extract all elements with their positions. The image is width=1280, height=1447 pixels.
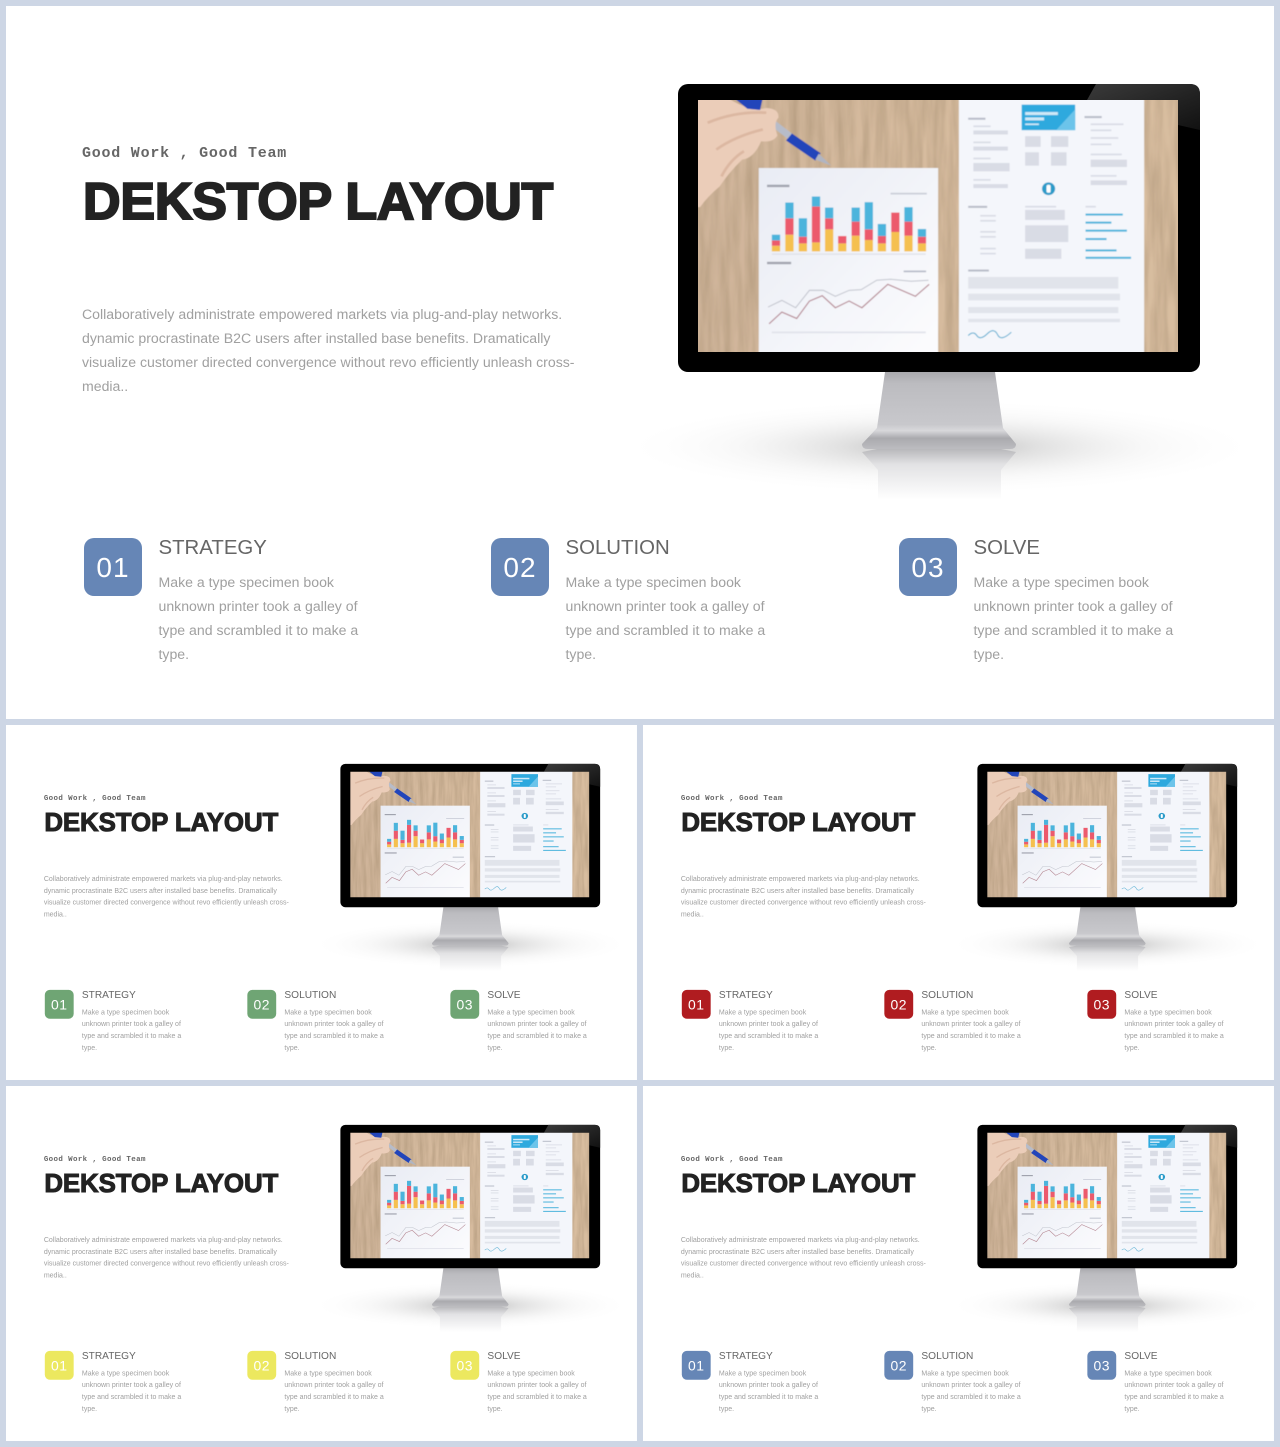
text block: description: visualize customer directed convergence without revo efficiently unleash cross- <box>681 898 926 906</box>
item 02: solution: SOLUTION <box>921 989 973 1000</box>
text block: description: visualize customer directed convergence without revo efficiently unleash cross- <box>44 898 289 906</box>
item 02: solution: type and scrambled it to make a <box>284 1393 384 1401</box>
panel: small slide, red theme <box>643 725 1274 1080</box>
item 01: strategy: Make a type specimen book <box>82 1008 169 1016</box>
item 03: solve: SOLVE <box>487 989 521 1000</box>
text block: description <box>681 874 926 918</box>
text block: description: dynamic procrastinate B2C users after installed base benefits. Dramatically <box>681 886 914 894</box>
item 03: solve: SOLVE <box>974 537 1040 559</box>
text block: description: Collaboratively administrate empowered markets via plug-and-play networks. <box>44 1235 283 1243</box>
title: DEKSTOP LAYOUT <box>681 1169 915 1198</box>
item 02: solution: type. <box>284 1044 300 1052</box>
item 01: strategy: STRATEGY <box>719 1350 773 1361</box>
item 02: solution: type. <box>284 1405 300 1413</box>
item 01: strategy <box>84 537 358 662</box>
item 03: solve: unknown printer took a galley of <box>1124 1381 1223 1389</box>
item 03: solve: 03 <box>1094 997 1110 1012</box>
item 02: solution: type. <box>921 1044 937 1052</box>
item 03: solve: SOLVE <box>487 1350 521 1361</box>
text block: description: Collaboratively administrate empowered markets via plug-and-play networks. <box>681 874 920 882</box>
item 01: strategy: type and scrambled it to make a <box>719 1032 818 1040</box>
item 03: solve: type and scrambled it to make a <box>1124 1032 1224 1040</box>
item 03: solve: type. <box>974 646 1004 662</box>
text block: description <box>82 306 574 394</box>
item 01: strategy: STRATEGY <box>719 989 773 1000</box>
image: desktop monitor showing charts <box>977 764 1238 966</box>
text block: description: visualize customer directed convergence without revo efficiently unleash cross- <box>44 1259 289 1267</box>
item 02: solution: type and scrambled it to make a <box>566 622 765 638</box>
panel: small slide, green theme <box>6 725 637 1080</box>
item 03: solve: Make a type specimen book <box>1124 1369 1212 1377</box>
item 03: solve: type and scrambled it to make a <box>487 1393 587 1401</box>
text block: description: dynamic procrastinate B2C users after installed base benefits. Dramatically <box>44 1247 277 1255</box>
item 02: solution: SOLUTION <box>284 989 336 1000</box>
item 01: strategy: STRATEGY <box>158 537 267 559</box>
item 01: strategy <box>682 1350 818 1413</box>
item 02: solution: SOLUTION <box>284 1350 336 1361</box>
item 02: solution: Make a type specimen book <box>921 1369 1009 1377</box>
item 01: strategy: Make a type specimen book <box>158 574 334 590</box>
text block: description: Collaboratively administrate empowered markets via plug-and-play networks. <box>44 874 283 882</box>
item 02: solution: SOLUTION <box>566 537 670 559</box>
text block: description <box>44 874 289 918</box>
item 03: solve: 03 <box>457 1358 473 1373</box>
item 02: solution: 02 <box>503 552 537 583</box>
item 02: solution <box>884 989 1021 1052</box>
item 02: solution: type and scrambled it to make a <box>921 1393 1021 1401</box>
item 01: strategy: 01 <box>51 1358 67 1373</box>
text block: description <box>44 1235 289 1279</box>
item 03: solve: 03 <box>1094 1358 1110 1373</box>
text block: description: dynamic procrastinate B2C users after installed base benefits. Dramatically <box>82 330 550 346</box>
item 02: solution: SOLUTION <box>921 1350 973 1361</box>
panel: small slide, blue theme <box>643 1086 1274 1441</box>
image: desktop monitor showing charts <box>340 1124 600 1327</box>
item 02: solution <box>247 989 384 1052</box>
item 02: solution: type. <box>566 646 596 662</box>
item 01: strategy: type. <box>719 1044 734 1052</box>
item 03: solve: Make a type specimen book <box>487 1369 575 1377</box>
item 02: solution: Make a type specimen book <box>284 1008 372 1016</box>
image: desktop monitor showing charts <box>977 1124 1238 1327</box>
item 01: strategy: type. <box>82 1044 97 1052</box>
item 03: solve: Make a type specimen book <box>974 574 1149 590</box>
text block: description: Collaboratively administrate empowered markets via plug-and-play networks. <box>681 1235 920 1243</box>
item 03: solve: type. <box>1124 1044 1140 1052</box>
item 02: solution <box>491 537 766 662</box>
item 01: strategy: unknown printer took a galley of <box>82 1381 181 1389</box>
item 02: solution: unknown printer took a galley of <box>284 1381 383 1389</box>
item 01: strategy: type. <box>158 646 189 662</box>
item 01: strategy: Make a type specimen book <box>82 1369 169 1377</box>
item 02: solution: type and scrambled it to make a <box>921 1032 1021 1040</box>
text block: description: dynamic procrastinate B2C users after installed base benefits. Dramatically <box>681 1247 914 1255</box>
item 02: solution: unknown printer took a galley of <box>921 1381 1020 1389</box>
item 01: strategy: type and scrambled it to make a <box>719 1393 818 1401</box>
title: DEKSTOP LAYOUT <box>681 808 915 837</box>
kicker: Good Work, Good Team: Good Work , Good Team <box>681 1155 783 1164</box>
item 01: strategy <box>44 1350 182 1413</box>
item 02: solution: type. <box>921 1405 937 1413</box>
item 03: solve: SOLVE <box>1124 989 1158 1000</box>
item 03: solve: SOLVE <box>1124 1350 1158 1361</box>
item 03: solve: unknown printer took a galley of <box>487 1381 586 1389</box>
item 02: solution: Make a type specimen book <box>566 574 741 590</box>
kicker: Good Work, Good Team: Good Work , Good Team <box>82 145 287 162</box>
item 01: strategy: type and scrambled it to make a <box>82 1393 181 1401</box>
text block: description: Collaboratively administrate empowered markets via plug-and-play networks. <box>82 306 562 322</box>
item 02: solution: 02 <box>891 1358 907 1373</box>
item 02: solution <box>247 1350 384 1413</box>
text block: description: visualize customer directed convergence without revo efficiently unleash cross- <box>82 354 574 370</box>
item 01: strategy: 01 <box>688 997 704 1012</box>
title: DEKSTOP LAYOUT <box>83 173 553 231</box>
item 02: solution: type and scrambled it to make a <box>284 1032 384 1040</box>
item 01: strategy: unknown printer took a galley of <box>82 1020 181 1028</box>
text block: description: media.. <box>681 1271 704 1279</box>
item 02: solution: unknown printer took a galley of <box>921 1020 1020 1028</box>
item 03: solve: 03 <box>911 552 945 583</box>
item 02: solution: 02 <box>254 1358 270 1373</box>
item 01: strategy: type and scrambled it to make a <box>82 1032 181 1040</box>
item 03: solve: unknown printer took a galley of <box>974 598 1172 614</box>
item 03: solve: type. <box>487 1405 503 1413</box>
image: desktop monitor showing charts <box>340 764 600 966</box>
kicker: Good Work, Good Team: Good Work , Good Team <box>44 794 146 803</box>
item 01: strategy <box>44 989 182 1052</box>
item 01: strategy: type. <box>82 1405 97 1413</box>
item 02: solution: 02 <box>891 997 907 1012</box>
item 03: solve: type and scrambled it to make a <box>1124 1393 1224 1401</box>
item 03: solve: Make a type specimen book <box>487 1008 575 1016</box>
text block: description: media.. <box>44 910 67 918</box>
item 02: solution: Make a type specimen book <box>921 1008 1009 1016</box>
image: desktop monitor showing charts <box>678 84 1200 490</box>
title: DEKSTOP LAYOUT <box>44 808 278 837</box>
text block: description <box>681 1235 926 1279</box>
text block: description: media.. <box>681 910 704 918</box>
item 01: strategy: STRATEGY <box>82 1350 136 1361</box>
item 01: strategy: type and scrambled it to make a <box>158 622 358 638</box>
item 01: strategy <box>682 989 818 1052</box>
item 01: strategy: 01 <box>51 997 67 1012</box>
item 03: solve: unknown printer took a galley of <box>487 1020 586 1028</box>
item 03: solve: 03 <box>457 997 473 1012</box>
item 01: strategy: 01 <box>688 1358 704 1373</box>
item 01: strategy: Make a type specimen book <box>719 1369 806 1377</box>
item 01: strategy: unknown printer took a galley of <box>158 598 358 614</box>
item 03: solve: unknown printer took a galley of <box>1124 1020 1223 1028</box>
kicker: Good Work, Good Team: Good Work , Good Team <box>681 794 783 803</box>
item 02: solution <box>884 1350 1021 1413</box>
item 01: strategy: type. <box>719 1405 734 1413</box>
item 03: solve <box>1087 1350 1224 1413</box>
text block: description: dynamic procrastinate B2C users after installed base benefits. Dramatically <box>44 886 277 894</box>
title: DEKSTOP LAYOUT <box>44 1169 278 1198</box>
item 03: solve <box>450 989 587 1052</box>
item 02: solution: Make a type specimen book <box>284 1369 372 1377</box>
item 03: solve: type. <box>1124 1405 1140 1413</box>
item 03: solve <box>450 1350 587 1413</box>
item 03: solve <box>1087 989 1224 1052</box>
panel: main slide, blue theme <box>6 6 1274 719</box>
item 01: strategy: 01 <box>96 552 130 583</box>
panel: small slide, yellow theme <box>6 1086 637 1441</box>
item 03: solve: type and scrambled it to make a <box>487 1032 587 1040</box>
item 03: solve: Make a type specimen book <box>1124 1008 1212 1016</box>
item 03: solve: type. <box>487 1044 503 1052</box>
item 02: solution: unknown printer took a galley of <box>284 1020 383 1028</box>
text block: description: media.. <box>82 378 128 394</box>
text block: description: media.. <box>44 1271 67 1279</box>
text block: description: visualize customer directed convergence without revo efficiently unleash cross- <box>681 1259 926 1267</box>
item 02: solution: 02 <box>254 997 270 1012</box>
item 03: solve: type and scrambled it to make a <box>974 622 1173 638</box>
item 01: strategy: unknown printer took a galley of <box>719 1381 818 1389</box>
item 01: strategy: STRATEGY <box>82 989 136 1000</box>
item 03: solve <box>899 537 1174 662</box>
item 02: solution: unknown printer took a galley of <box>566 598 764 614</box>
item 01: strategy: unknown printer took a galley of <box>719 1020 818 1028</box>
kicker: Good Work, Good Team: Good Work , Good Team <box>44 1155 146 1164</box>
item 01: strategy: Make a type specimen book <box>719 1008 806 1016</box>
